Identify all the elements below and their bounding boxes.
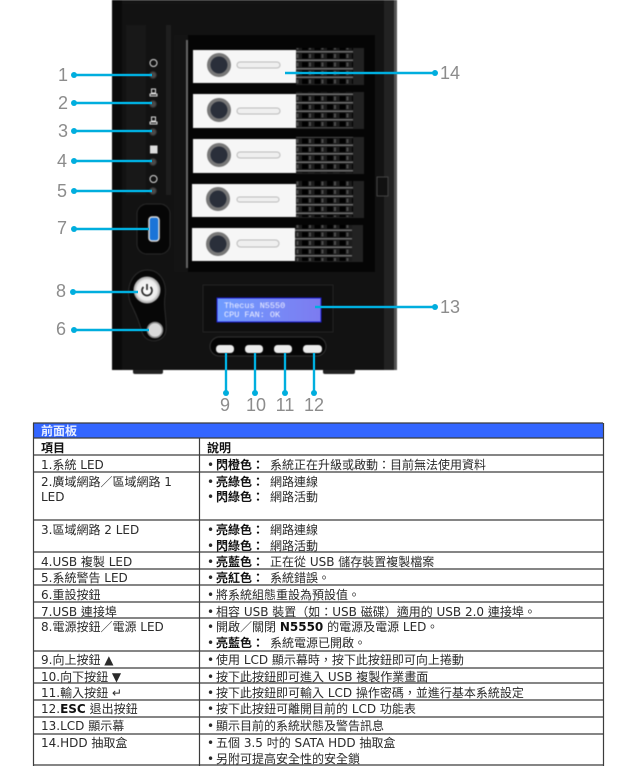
row 8: • [207,620,214,634]
callout 10 [246,353,266,415]
row 5: • [207,571,214,585]
row 4: 4.USB 複製 LED [41,554,132,569]
row 1: 1.系統 LED [41,458,104,472]
row 3: 3.區域網路 2 LED [41,522,139,537]
row 7: • [207,605,214,619]
drive tray 5 [192,225,363,262]
device feet [133,368,355,374]
row 3: 閃綠色： [216,538,264,553]
row 8: 亮藍色： [216,635,264,650]
callout 9 [220,353,230,415]
row 11: • [207,686,214,700]
callout lines and numbers [56,63,460,415]
drive tray 1 [193,48,364,85]
table header bar: 前面板 [41,423,77,438]
table header bar [34,423,603,438]
NAS device front view [112,0,397,374]
column headings [41,440,231,455]
row 8 [41,619,438,650]
callout 11 [276,353,294,415]
callout 7 [57,218,149,238]
row 7 [41,604,536,619]
row 3: • [207,523,214,537]
row 1: • [207,458,214,472]
row 13 [41,718,384,733]
row 11: 按下此按鈕即可輸入 LCD 操作密碼，並進行基本系統設定 [216,685,524,700]
row 12: 按下此按鈕可離開目前的 LCD 功能表 [216,701,416,716]
row 7: 7.USB 連接埠 [41,604,117,619]
row 2: LED [41,490,65,504]
callout 1 [58,65,152,85]
row 2: 閃綠色： [216,489,264,504]
USB port [137,204,170,254]
row 5: 5.系統警告 LED [41,570,128,585]
row 14 [41,735,395,766]
row 6 [41,587,360,602]
callout 14 [285,63,460,83]
column headings: 說明 [207,440,231,455]
row 5 [41,570,330,585]
row 2: 網路連線 [270,474,318,489]
row 1 [41,457,486,472]
row 4: 亮藍色： [216,554,264,569]
callout 3 [58,121,152,141]
callout 6: 6 [56,319,66,339]
callout 13 [315,297,460,317]
row 13: • [207,719,214,733]
row 9: 使用 LCD 顯示幕時，按下此按鈕即可向上捲動 [216,652,464,667]
LCD screen: CPU FAN: OK [224,310,281,320]
callout 9: 9 [220,395,230,415]
row 3 [41,522,318,553]
callout 3: 3 [58,121,68,141]
callout 11: 11 [276,395,294,415]
row 5: 系統錯誤。 [270,570,330,585]
row 11 [41,685,524,700]
row 7: 相容 USB 裝置（如：USB 磁碟）適用的 USB 2.0 連接埠。 [216,604,536,619]
column headings: 項目 [41,441,65,455]
LCD screen [217,298,321,322]
row 4 [41,554,434,569]
callout 14: 14 [440,63,460,83]
row 8: 開啟／關閉 N5550 的電源及電源 LED。 [216,619,438,634]
callout 12: 12 [304,395,324,415]
callout 13: 13 [440,297,460,317]
row 11: 11.輸入按鈕 ↵ [41,685,122,700]
drive bay frame [174,35,375,272]
row 14: • [207,736,214,750]
power button [134,276,160,304]
drive tray 4 [192,181,364,218]
row 8: 系統電源已開啟。 [270,636,366,650]
row 2: 2.廣域網路／區域網路 1 [41,474,172,489]
row 12: • [207,702,214,716]
callout 5 [57,181,152,201]
row 10: 按下此按鈕即可進入 USB 複製作業畫面 [216,669,428,684]
callout 12 [304,353,324,415]
row 3: 網路活動 [270,538,318,553]
front panel table [33,423,604,766]
row 14: 另附可提高安全性的安全鎖 [216,751,360,766]
LCD buttons [210,337,326,356]
callout 5: 5 [57,181,67,201]
row 6: 6.重設按鈕 [41,587,100,602]
row 1: 閃橙色： [216,457,264,472]
table grid [33,423,604,766]
row 2: 網路活動 [270,489,318,504]
row 12: 12.ESC 退出按鈕 [41,701,138,716]
row 9: • [207,653,214,667]
callout 1: 1 [58,65,68,85]
power and reset housing [129,270,166,341]
callout 2 [58,93,152,113]
row 3: • [207,539,214,553]
row 4: • [207,555,214,569]
row 4: 正在從 USB 儲存裝置複製檔案 [270,554,434,569]
callout 2: 2 [58,93,68,113]
row 2: 亮綠色： [216,474,264,489]
row 13: 13.LCD 顯示幕 [41,719,124,733]
row 14: 14.HDD 抽取盒 [41,735,127,750]
reset button [148,322,162,338]
LCD screen: Thecus N5550 [224,301,285,311]
LED icons [150,60,157,182]
row 6: • [207,588,214,602]
row 14: • [207,752,214,766]
callout 8: 8 [56,281,66,301]
callout 8 [56,281,138,301]
status LEDs [150,72,156,194]
row 9 [41,652,464,667]
device body [112,0,397,370]
row 14: 五個 3.5 吋的 SATA HDD 抽取盒 [216,735,395,750]
callout 4: 4 [57,151,67,171]
row 2: • [207,490,214,504]
row 1: 系統正在升級或啟動：目前無法使用資料 [270,457,486,472]
row 12 [41,701,416,716]
row 5: 亮紅色： [216,570,264,585]
callout 10: 10 [246,395,266,415]
row 8: 8.電源按鈕／電源 LED [41,619,164,634]
row 6: 將系統組態重設為預設值。 [216,587,360,602]
callout 6 [56,319,149,339]
callout 4 [57,151,152,171]
row 10: 10.向下按鈕 ▼ [41,669,122,684]
drive tray 2 [193,92,364,129]
row 10: • [207,670,214,684]
callout 7: 7 [57,218,67,238]
row 8: • [207,636,214,650]
row 2: • [207,475,214,489]
row 2 [41,474,318,504]
LCD bezel [203,285,333,332]
row 10 [41,669,428,684]
drive tray 3 [193,137,364,174]
row 9: 9.向上按鈕 ▲ [41,652,114,667]
row 3: 亮綠色： [216,522,264,537]
row 3: 網路連線 [270,522,318,537]
row 13: 顯示目前的系統狀態及警告訊息 [216,718,384,733]
side latch [377,177,388,196]
